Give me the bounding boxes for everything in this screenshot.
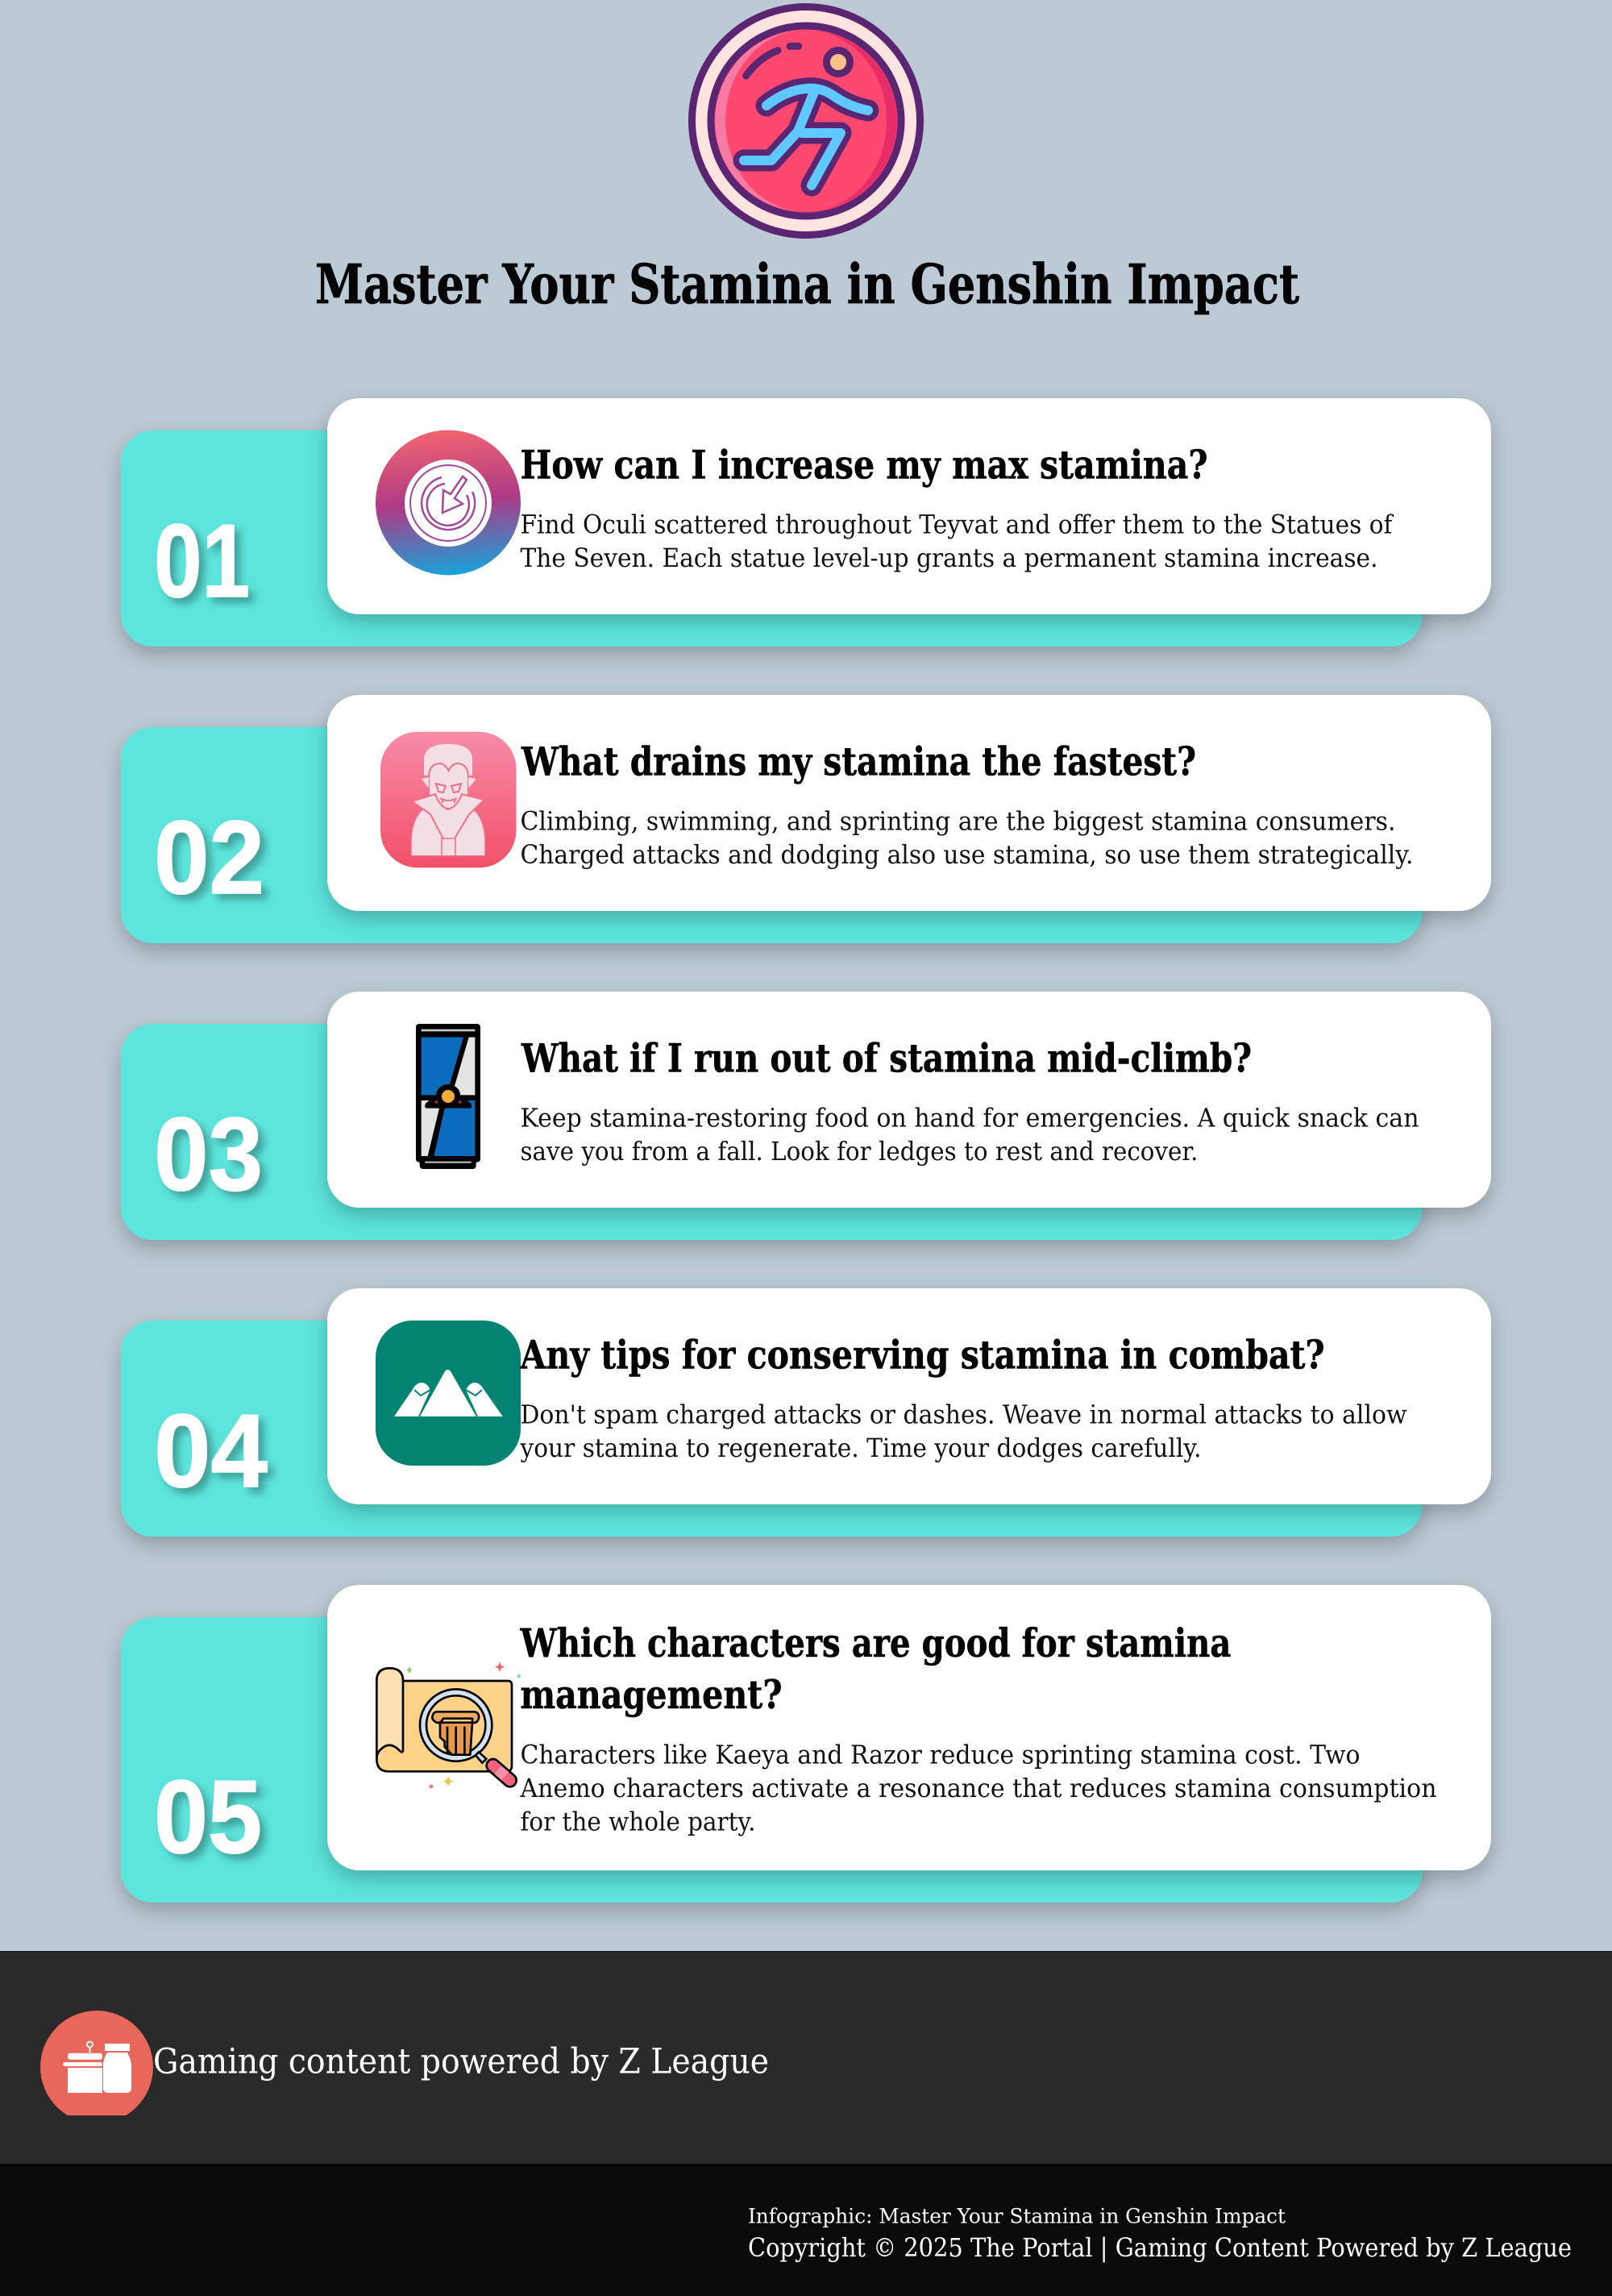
white card 02 (327, 695, 1491, 911)
body text 02: Charged attacks and dodging also use stamina, so use them strategically. (521, 839, 1414, 870)
icon: scroll and magnifier (376, 1662, 521, 1788)
icon: vampire (380, 732, 516, 867)
body text 02 (521, 806, 1414, 870)
panel: question 01 (121, 398, 1491, 647)
footer tagline: Gaming content powered by Z League (153, 2041, 769, 2082)
body text 04: Don't spam charged attacks or dashes. Weave in normal attacks to allow (521, 1400, 1407, 1430)
body text 03: Keep stamina-restoring food on hand for emergencies. A quick snack can (521, 1103, 1419, 1133)
icon: food jars (40, 2011, 153, 2123)
teal number tab 02 (121, 727, 1423, 943)
body text 01 (521, 510, 1394, 573)
body text 05 (520, 1740, 1437, 1836)
white card 03 (327, 992, 1491, 1208)
body text 05: for the whole party. (521, 1806, 756, 1836)
teal number tab 05 (121, 1617, 1423, 1903)
icon: oculi circle (376, 430, 521, 576)
number 05: 05 (154, 1759, 262, 1875)
white card 01 (327, 398, 1491, 614)
icon: running stamina badge (692, 6, 920, 235)
body text 01: Find Oculi scattered throughout Teyvat and offer them to the Statues of (521, 510, 1394, 540)
white card 04 (327, 1288, 1491, 1504)
heading 04: Any tips for conserving stamina in combat? (520, 1332, 1325, 1379)
icon: energy drink can (416, 1024, 480, 1169)
body text 03 (521, 1103, 1419, 1167)
white card 05 (327, 1585, 1491, 1870)
panel: question 05 (121, 1585, 1491, 1903)
teal number tab 01 (121, 430, 1423, 647)
heading 05: management? (521, 1671, 782, 1718)
body text 04 (520, 1400, 1407, 1463)
heading 05: Which characters are good for stamina (520, 1620, 1232, 1666)
panel: question 04 (121, 1288, 1491, 1537)
body text 02: Climbing, swimming, and sprinting are the biggest stamina consumers. (521, 806, 1396, 837)
infographic credit line: Infographic: Master Your Stamina in Genshin Impact (748, 2204, 1286, 2228)
number 01: 01 (154, 503, 250, 619)
panel: footer band (0, 1951, 1612, 2164)
panel: question 02 (121, 695, 1491, 943)
body text 05: Anemo characters activate a resonance that reduces stamina consumption (520, 1773, 1437, 1803)
heading 02: What drains my stamina the fastest? (521, 738, 1196, 785)
heading 01: How can I increase my max stamina? (521, 442, 1207, 489)
body text 03: save you from a fall. Look for ledges to rest and recover. (521, 1136, 1198, 1167)
number 02: 02 (154, 800, 264, 916)
number 03: 03 (154, 1096, 263, 1212)
teal number tab 04 (121, 1321, 1423, 1537)
title: Master Your Stamina in Genshin Impact (315, 252, 1299, 316)
body text 01: The Seven. Each statue level-up grants a permanent stamina increase. (521, 543, 1378, 573)
panel: question 03 (121, 992, 1491, 1240)
teal number tab 03 (121, 1024, 1423, 1240)
body text 04: your stamina to regenerate. Time your dodges carefully. (520, 1433, 1201, 1463)
heading 05 (520, 1620, 1232, 1718)
panel: copyright bar (0, 2164, 1612, 2296)
body text 05: Characters like Kaeya and Razor reduce sprinting stamina cost. Two (521, 1740, 1361, 1770)
number 04: 04 (154, 1393, 268, 1509)
heading 03: What if I run out of stamina mid-climb? (521, 1035, 1252, 1082)
icon: mountains (376, 1321, 521, 1466)
